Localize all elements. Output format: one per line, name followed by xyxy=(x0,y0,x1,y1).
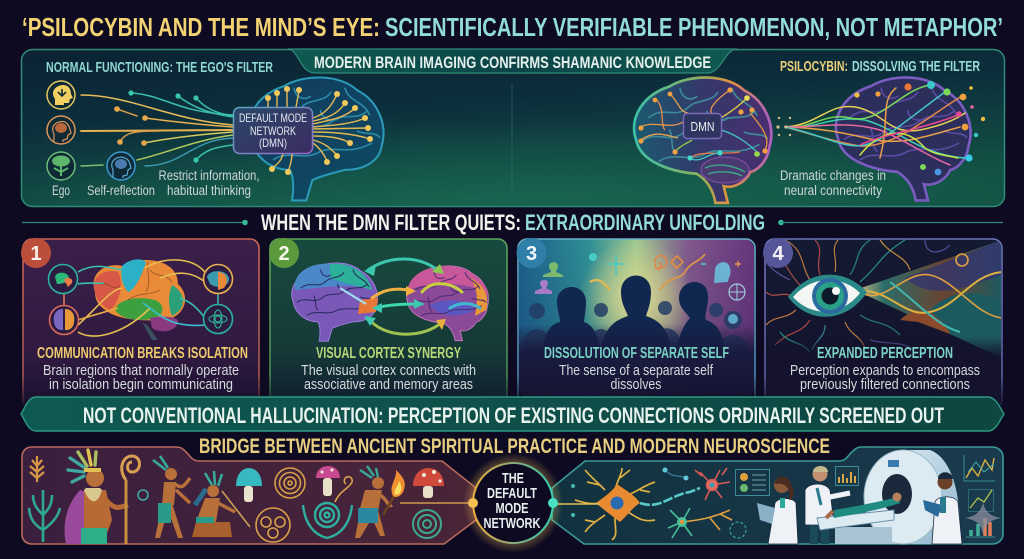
card 3 text: The sense of a separate self xyxy=(559,363,714,379)
neuron orange xyxy=(575,468,655,540)
neuron green xyxy=(668,508,732,538)
mushrooms xyxy=(236,466,444,502)
card 2 text xyxy=(301,363,476,393)
heading: bridge: BRIDGE BETWEEN ANCIENT SPIRITUAL PRACTICE AND MODERN NEUROSCIENCE xyxy=(199,435,830,458)
banner: not conventional hallucination xyxy=(21,397,1004,431)
panel: card 2 visual cortex xyxy=(269,238,507,409)
axon xyxy=(640,488,700,505)
data charts right xyxy=(964,455,995,537)
illustration: two brains with arrows xyxy=(292,259,489,341)
heading: dissolving the filter: PSILOCYBIN: xyxy=(780,58,848,75)
badge 1 xyxy=(21,238,51,268)
illustration: connected brain regions xyxy=(64,259,218,340)
card 1 text: in isolation begin communicating xyxy=(49,377,233,393)
chief figure xyxy=(65,450,140,544)
panel: brain imaging comparison xyxy=(22,49,1004,206)
badge 4: 4 xyxy=(772,243,784,265)
panel: modern neuroscience xyxy=(552,447,1003,544)
panel: card 4 expanded perception xyxy=(763,238,1002,409)
doctor at right xyxy=(923,472,962,544)
eye xyxy=(788,275,867,317)
card 1 heading: COMMUNICATION BREAKS ISOLATION xyxy=(37,345,248,362)
patient bed xyxy=(817,492,902,544)
central circle: default mode network xyxy=(463,453,563,553)
neuron red xyxy=(695,468,730,500)
brain: dissolved filter with flowing connections xyxy=(776,77,985,200)
male doctor xyxy=(805,466,850,544)
banner tab: modern brain imaging: MODERN BRAIN IMAGING CONFIRMS SHAMANIC KNOWLEDGE xyxy=(314,53,711,72)
heading: normal functioning: NORMAL FUNCTIONING: THE EGO'S FILTER xyxy=(46,59,273,76)
card 4 text xyxy=(790,363,980,393)
title xyxy=(22,12,1003,42)
panel: card 1 communication xyxy=(21,238,259,409)
DMN filter box: NETWORK xyxy=(250,124,296,138)
radiating lines xyxy=(766,240,950,352)
small connection dots xyxy=(571,468,746,538)
icon: head with brain xyxy=(47,116,75,144)
neural lines inside brain xyxy=(265,86,373,175)
label: dramatic changes: Dramatic changes in xyxy=(780,168,886,183)
central circle: default mode network: DEFAULT xyxy=(487,485,537,502)
icon: ego head xyxy=(47,81,75,109)
section heading: when the DMN filter quiets: EXTRAORDINARY UNFOLDING xyxy=(525,210,765,235)
card 2 text: The visual cortex connects with xyxy=(301,363,476,379)
central circle: default mode network: MODE xyxy=(496,500,528,517)
card 4 heading: EXPANDED PERCEPTION xyxy=(817,345,953,362)
card 1 text: Brain regions that normally operate xyxy=(43,363,239,379)
central circle: default mode network: THE xyxy=(502,470,524,487)
badge 2: 2 xyxy=(278,243,290,265)
MRI scanner xyxy=(864,450,960,544)
DMN filter box xyxy=(234,108,312,154)
kneeling figure xyxy=(192,471,250,537)
section heading: when the DMN filter quiets: WHEN THE DMN FILTER QUIETS: xyxy=(261,210,521,235)
golden beam xyxy=(400,502,472,504)
card 3 text xyxy=(559,363,714,393)
brain: colourful with DMN xyxy=(634,78,771,203)
title: ‘PSILOCYBIN AND THE MIND’S EYE: xyxy=(22,12,380,42)
DMN filter box: DEFAULT MODE xyxy=(239,111,307,125)
sparkle xyxy=(965,502,1001,534)
card 4 text: previously filtered connections xyxy=(800,377,970,393)
floating symbols xyxy=(535,253,745,324)
card 1 text xyxy=(43,363,239,393)
labels: ego, self-reflection, restrict information: habitual thinking xyxy=(167,183,251,198)
labels: ego, self-reflection, restrict information: Ego xyxy=(52,183,70,198)
DMN label box: DMN xyxy=(690,119,714,134)
labels: ego, self-reflection, restrict information: Self-reflection xyxy=(87,183,155,198)
card 3 text: dissolves xyxy=(610,377,662,393)
card 4 text: Perception expands to encompass xyxy=(790,363,980,379)
icon: tree xyxy=(47,152,75,180)
card 2 text: associative and memory areas xyxy=(304,377,473,393)
badge 3 xyxy=(516,238,546,268)
light cone of patterns xyxy=(855,240,1002,358)
neural lines converging on filter xyxy=(81,90,233,166)
chart xyxy=(836,466,858,486)
icon: self-reflection head xyxy=(107,152,135,180)
badge 3: 3 xyxy=(526,243,537,265)
card 3 heading: DISSOLUTION OF SEPARATE SELF xyxy=(544,345,729,362)
badge 2 xyxy=(269,238,299,268)
banner tab: modern brain imaging xyxy=(288,49,737,73)
plants xyxy=(29,456,60,542)
DMN filter box: (DMN) xyxy=(259,136,287,150)
card 2 heading: VISUAL CORTEX SYNERGY xyxy=(316,345,461,362)
silhouettes of people xyxy=(522,301,748,350)
panel: card 3 dissolution xyxy=(516,238,755,409)
panel: ancient shamanic practice xyxy=(22,447,476,544)
section heading: when the DMN filter quiets xyxy=(22,210,1003,235)
label: dramatic changes xyxy=(780,168,886,198)
brain: normal with DMN xyxy=(249,77,383,200)
label: dramatic changes: neural connectivity xyxy=(784,183,882,198)
DMN label box xyxy=(684,114,722,138)
labels: ego, self-reflection, restrict information xyxy=(52,168,260,198)
data display board xyxy=(736,470,770,496)
labels: ego, self-reflection, restrict information: Restrict information, xyxy=(158,168,260,183)
central circle: default mode network: NETWORK xyxy=(484,515,541,532)
spirals and symbols xyxy=(138,468,441,542)
heading: dissolving the filter xyxy=(780,58,980,75)
icons: four connected circles xyxy=(48,264,232,334)
female doctor xyxy=(757,476,798,544)
badge 1: 1 xyxy=(30,243,42,265)
figure with torch xyxy=(355,466,405,538)
dancer figure xyxy=(153,456,190,538)
badge 4 xyxy=(763,238,793,268)
